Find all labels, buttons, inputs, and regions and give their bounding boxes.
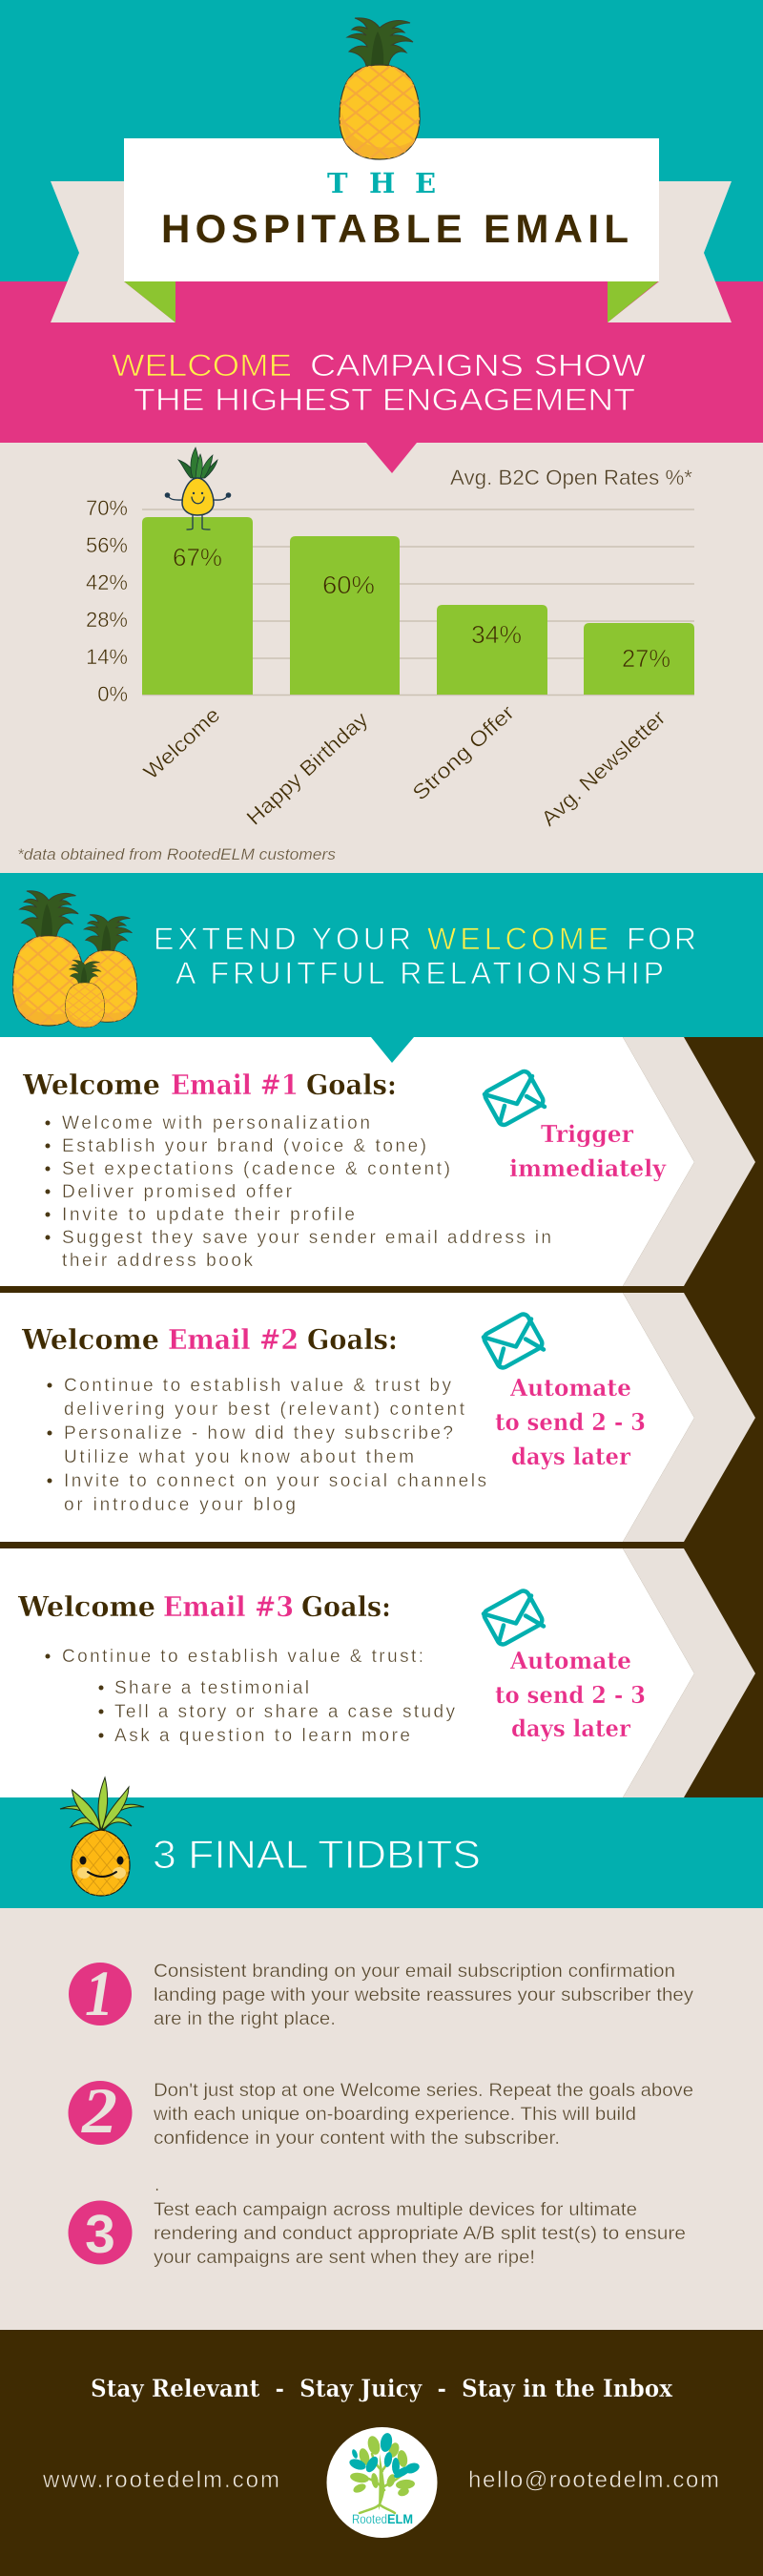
- tidbit 2: 2: [81, 2074, 117, 2147]
- heading: 3 final tidbits: 3 FINAL TIDBITS: [153, 1832, 481, 1877]
- list: email 1 goals: [46, 1113, 551, 1271]
- footnote: *data obtained from RootedELM customers: [17, 845, 337, 863]
- y axis labels: 14%: [86, 645, 128, 669]
- x axis labels: [138, 700, 670, 831]
- website: www.rootedelm.com: [42, 2467, 279, 2493]
- panel: chart background: [0, 443, 763, 873]
- icon: envelope: [484, 1070, 545, 1127]
- heading: extend your welcome: A FRUITFUL RELATIONSHIP: [175, 956, 664, 990]
- heading: email 1 goals: Goals:: [306, 1069, 397, 1101]
- title: HOSPITABLE EMAIL: [161, 206, 629, 251]
- callout: automate: Automate: [509, 1647, 631, 1674]
- heading: email 3 goals: Email #3: [163, 1590, 294, 1623]
- list: email 2 goals: Utilize what you know about them: [64, 1447, 414, 1467]
- arrow: teal pointer: [371, 1037, 414, 1063]
- list: email 1 goals: Set expectations (cadence & content): [62, 1159, 450, 1179]
- ribbon banner: [51, 138, 732, 322]
- tidbit 1: are in the right place.: [154, 2009, 336, 2029]
- title: THE: [327, 167, 436, 199]
- tidbit 1: 1: [85, 1957, 113, 2029]
- tidbit 2: [69, 2074, 693, 2149]
- y axis labels: 70%: [86, 496, 128, 520]
- callout: automate: [495, 1374, 646, 1470]
- y axis labels: 56%: [86, 533, 128, 557]
- callout: trigger immediately: [509, 1120, 667, 1182]
- y axis labels: [86, 496, 128, 706]
- headline: welcome campaigns: WELCOME: [112, 348, 292, 383]
- callout: automate: to send 2 - 3: [495, 1408, 646, 1436]
- bar values: 34%: [471, 620, 522, 649]
- list: email 3 goals: Share a testimonial: [114, 1678, 309, 1698]
- y axis labels: 42%: [86, 571, 128, 594]
- tidbit 3: rendering and conduct appropriate A/B split test(s) to ensure: [154, 2224, 686, 2244]
- panel: email 3: [0, 1548, 755, 1797]
- tidbit 1: Consistent branding on your email subscription confirmation: [154, 1962, 675, 1982]
- heading: email 2 goals: Goals:: [307, 1323, 398, 1356]
- heading: extend your welcome: FOR: [627, 922, 696, 956]
- bar values: 60%: [322, 571, 375, 599]
- tidbit 2: with each unique on-boarding experience. This will build: [153, 2105, 636, 2125]
- list: email 1 goals: Establish your brand (voice & tone): [62, 1136, 426, 1156]
- logo: RootedELM tree: [326, 2427, 437, 2538]
- heading: email 1 goals: Email #1: [171, 1069, 299, 1101]
- list: email 1 goals: Suggest they save your sender email address in: [62, 1228, 551, 1248]
- heading: email 1 goals: Welcome: [22, 1069, 160, 1101]
- x axis labels: Happy Birthday: [241, 707, 373, 830]
- panel: email goals background: [0, 1037, 763, 1797]
- heading: email 3 goals: Goals:: [301, 1590, 391, 1623]
- tidbit 3: [69, 2175, 686, 2268]
- tidbit 1: landing page with your website reassures your subscriber they: [154, 1985, 694, 2005]
- y axis labels: 0%: [97, 682, 128, 706]
- list: email 2 goals: [48, 1376, 486, 1515]
- bar chart: [86, 466, 694, 831]
- icon: three pineapples: [13, 891, 137, 1028]
- callout: automate: to send 2 - 3: [495, 1681, 646, 1709]
- list: email 1 goals: Welcome with personalization: [62, 1113, 370, 1133]
- heading: email 3 goals: Welcome: [17, 1590, 155, 1623]
- tidbit 2: confidence in your content with the subscriber.: [154, 2129, 560, 2149]
- tidbit 3: your campaigns are sent when they are ripe!: [154, 2248, 535, 2268]
- panel: email 2: [0, 1293, 755, 1542]
- callout: trigger immediately: Trigger: [541, 1120, 633, 1148]
- list: email 3 goals: Tell a story or share a case study: [114, 1702, 456, 1722]
- heading: extend your welcome: EXTEND YOUR: [154, 922, 411, 956]
- x axis labels: Strong Offer: [407, 700, 519, 805]
- list: email 2 goals: Continue to establish value & trust by: [64, 1376, 452, 1396]
- callout: automate: days later: [511, 1443, 630, 1470]
- x axis labels: Avg. Newsletter: [536, 705, 670, 831]
- list: email 3 goals: [46, 1647, 456, 1746]
- list: email 3 goals: Continue to establish value & trust:: [62, 1647, 423, 1667]
- headline: welcome campaigns: [112, 348, 647, 417]
- heading: email 1 goals: [22, 1069, 397, 1101]
- bar values: [173, 543, 670, 673]
- callout: automate: days later: [511, 1714, 630, 1742]
- header background: [0, 0, 763, 281]
- heading: email 3 goals: [17, 1590, 391, 1623]
- logo: RootedELM tree: ELM: [387, 2511, 413, 2526]
- list: email 1 goals: Deliver promised offer: [62, 1182, 293, 1202]
- panel: email 1: [0, 1037, 755, 1286]
- panel: final tidbits header: [0, 1797, 763, 1908]
- tidbit 1: [69, 1957, 694, 2029]
- tidbit 3: Test each campaign across multiple devices for ultimate: [154, 2200, 637, 2220]
- icon: smiling pineapple: [60, 1777, 144, 1896]
- x axis labels: Welcome: [138, 702, 224, 784]
- arrow: pink pointer: [366, 443, 417, 473]
- pink headline band: [0, 281, 763, 443]
- footer slogan: Stay Relevant - Stay Juicy - Stay in the Inbox: [91, 2375, 673, 2402]
- tidbit 3: .: [155, 2175, 159, 2195]
- panel: tidbits: [0, 1908, 763, 2330]
- bar values: 27%: [622, 644, 670, 673]
- panel: footer: [0, 2330, 763, 2576]
- bar values: 67%: [173, 543, 222, 571]
- email: hello@rootedelm.com: [468, 2467, 719, 2493]
- headline: welcome campaigns: CAMPAIGNS SHOW: [310, 348, 647, 383]
- list: email 1 goals: Invite to update their profile: [62, 1205, 355, 1225]
- callout: automate: Automate: [509, 1374, 631, 1402]
- tidbit 2: Don't just stop at one Welcome series. Repeat the goals above: [154, 2081, 693, 2101]
- heading: email 2 goals: [21, 1323, 398, 1356]
- bars: [142, 517, 694, 695]
- headline: welcome campaigns: THE HIGHEST ENGAGEMENT: [134, 383, 635, 417]
- heading: extend your welcome: WELCOME: [427, 922, 608, 956]
- heading: email 2 goals: Email #2: [168, 1323, 299, 1356]
- icon: cartoon pineapple: [165, 447, 231, 530]
- list: email 2 goals: or introduce your blog: [64, 1495, 296, 1515]
- callout: trigger immediately: immediately: [509, 1154, 667, 1182]
- list: email 1 goals: their address book: [62, 1251, 254, 1271]
- tidbit 3: 3: [85, 2204, 115, 2265]
- icon: envelope: [483, 1312, 544, 1370]
- panel: extend your welcome header: [0, 873, 763, 1037]
- list: email 2 goals: delivering your best (relevant) content: [64, 1400, 465, 1420]
- y axis labels: 28%: [86, 608, 128, 632]
- list: email 3 goals: Ask a question to learn more: [114, 1726, 410, 1746]
- chart title: Avg. B2C Open Rates %*: [450, 466, 692, 489]
- icon: pineapple: [340, 18, 420, 159]
- logo: RootedELM tree: Rooted: [352, 2511, 387, 2526]
- callout: automate: [495, 1647, 646, 1742]
- icon: envelope: [483, 1589, 544, 1647]
- list: email 2 goals: Invite to connect on your social channels: [64, 1471, 486, 1491]
- list: email 2 goals: Personalize - how did they subscribe?: [64, 1423, 453, 1444]
- heading: extend your welcome: [154, 922, 696, 990]
- title: [161, 167, 629, 251]
- heading: email 2 goals: Welcome: [21, 1323, 159, 1356]
